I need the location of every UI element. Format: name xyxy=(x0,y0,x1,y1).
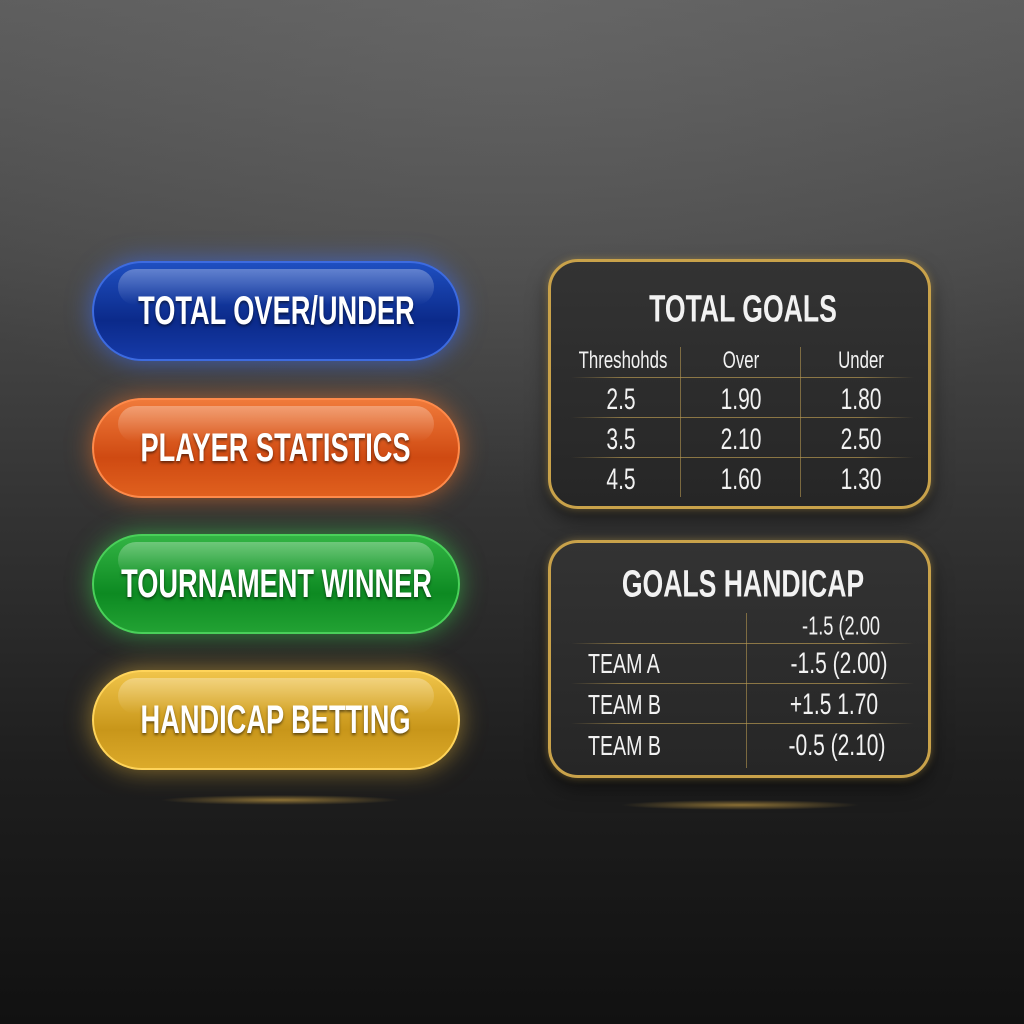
heading: goals handicap: GOALS HANDICAP xyxy=(622,564,864,606)
table: handicap: TEAM A xyxy=(588,648,660,679)
table: handicap: -1.5 (2.00 xyxy=(802,610,880,640)
table: handicap: -0.5 (2.10) xyxy=(789,729,885,762)
pill: handicap betting xyxy=(92,670,460,770)
table: total goals: 1.30 xyxy=(841,463,881,496)
table: total goals: 1.60 xyxy=(721,463,761,496)
pill: handicap betting: HANDICAP BETTING xyxy=(141,698,411,742)
pill: total over/under: TOTAL OVER/UNDER xyxy=(138,288,414,332)
pill: total over/under xyxy=(92,261,460,361)
table: total goals: 1.80 xyxy=(841,383,881,416)
panel: total goals xyxy=(548,259,931,509)
table: total goals: 2.10 xyxy=(721,423,761,456)
table: handicap: -1.5 (2.00) xyxy=(791,647,887,680)
pill: tournament winner xyxy=(92,534,460,634)
table: handicap: +1.5 1.70 xyxy=(790,688,878,721)
panel: goals handicap xyxy=(548,540,931,778)
pill: player statistics: PLAYER STATISTICS xyxy=(141,426,411,470)
table: total goals: 3.5 xyxy=(606,423,636,456)
pill: player statistics xyxy=(92,398,460,498)
table: total goals: Threshohds xyxy=(579,347,667,374)
table: handicap: TEAM B xyxy=(588,730,661,761)
table: handicap xyxy=(588,610,887,762)
table: total goals: Under xyxy=(838,347,884,374)
table: total goals: 2.50 xyxy=(841,423,881,456)
table: total goals: 1.90 xyxy=(721,383,761,416)
pill: tournament winner: TOURNAMENT WINNER xyxy=(121,562,431,606)
heading: total goals: TOTAL GOALS xyxy=(649,288,837,330)
table: total goals: Over xyxy=(723,347,759,374)
table: handicap: TEAM B xyxy=(588,689,661,720)
table: total goals: 4.5 xyxy=(606,463,636,496)
table: total goals: 2.5 xyxy=(606,383,636,416)
table: total goals xyxy=(579,347,884,496)
